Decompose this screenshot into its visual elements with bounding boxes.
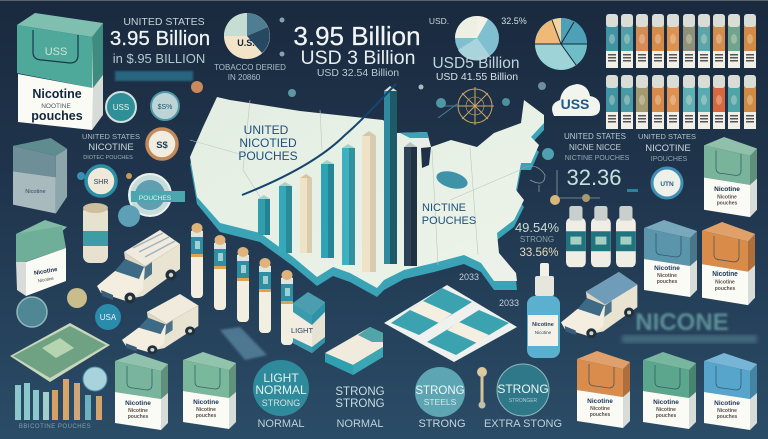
strength badge: light normal strong: STRONG xyxy=(262,398,300,408)
badge: pouches ribbon: POUCHES xyxy=(139,195,172,202)
caption: mini chart: BBICOTINE POUCHES xyxy=(19,424,91,430)
map label: west: POUCHES xyxy=(238,149,298,163)
small tin xyxy=(83,203,108,263)
tube row 1 xyxy=(606,14,756,68)
heading: USD5 Billion: USD 41.55 Billion xyxy=(436,71,518,83)
package: bottom blue box xyxy=(704,353,757,430)
strength badge: strong ring xyxy=(497,364,549,416)
cloud: USS: USS xyxy=(561,96,589,112)
package: large nicotine pouches box xyxy=(17,13,103,130)
blurred pouch pile xyxy=(220,327,267,360)
badge: pouches ribbon xyxy=(129,174,185,216)
package: small pack xyxy=(325,327,383,375)
package: bottom green box 1: pouches xyxy=(128,414,148,420)
package: green box lower left xyxy=(16,220,67,296)
badge: USA: USA xyxy=(100,313,117,322)
pouch tray xyxy=(384,285,517,362)
package: bottom orange box: Nicotine xyxy=(590,406,610,412)
map label: east: POUCHES xyxy=(422,215,476,227)
package: bottom orange box xyxy=(577,351,630,428)
badge: USS: USS xyxy=(113,103,129,112)
map label: east: NICTINE xyxy=(422,202,466,214)
package: bottom green box 3 xyxy=(643,352,696,429)
package: bottom green box 2: pouches xyxy=(196,413,216,419)
box text: Nicotine xyxy=(34,267,59,277)
badge: SHR: SHR xyxy=(94,179,108,186)
package: orange box: Nicotine xyxy=(712,271,738,278)
pie 2 labels: USD. xyxy=(429,16,449,26)
package: green box lower left: Nicotine xyxy=(37,276,55,283)
cloud: USS xyxy=(552,84,600,116)
text block: United States Nicotine right: IPOUCHES xyxy=(651,156,688,163)
package: bottom green box 3: pouches xyxy=(656,413,676,419)
text block: United States nicne: NICTINE POUCHES xyxy=(565,155,630,162)
badge: UTN xyxy=(652,168,682,198)
package: left middle box: Nicotine xyxy=(25,189,46,195)
bar chart xyxy=(258,86,417,272)
disc xyxy=(17,297,47,327)
caption: tobacco derived: IN 20860 xyxy=(228,73,261,82)
strength badge: strong steels: STRONG xyxy=(415,385,465,397)
strength label: strong: STRONG xyxy=(418,418,466,430)
product name: Nicotine xyxy=(32,87,82,101)
map label: west: UNITED xyxy=(244,123,289,137)
strength label: extra strong: EXTRA STONG xyxy=(484,418,562,430)
badge: S$ orange ring xyxy=(147,129,177,159)
badge: UTN: UTN xyxy=(660,181,674,188)
box label: LIGHT xyxy=(291,326,313,335)
package: bottom green box 3: Nicotine xyxy=(653,399,679,406)
strength badge: light normal strong xyxy=(253,360,309,416)
text block: United States Nicotine: NICOTINE xyxy=(88,142,134,153)
pie chart 2 xyxy=(455,16,499,60)
blurred word: nicone: NICONE xyxy=(635,309,729,336)
package: bottom orange box: Nicotine xyxy=(587,398,613,405)
van 1 xyxy=(97,230,180,304)
package: orange box: pouches xyxy=(715,286,735,292)
package: green box right: pouches xyxy=(717,201,737,207)
connector nodes xyxy=(520,148,638,205)
strength label: normal: NORMAL xyxy=(257,418,305,430)
statistics: strength share: STRONG xyxy=(520,235,554,244)
package: blue box: pouches xyxy=(657,279,677,285)
tube row 2 xyxy=(606,75,756,129)
text block: United States Nicotine right xyxy=(638,132,696,163)
small bottles xyxy=(566,206,636,267)
badge: SS% xyxy=(151,92,179,120)
strength badge: strong ring: STRONG xyxy=(497,382,549,396)
package: orange box: Nicotine xyxy=(715,279,735,286)
money stack xyxy=(10,323,110,382)
caption: tobacco derived: TOBACCO DERIED xyxy=(214,63,286,72)
van 2 xyxy=(122,294,198,354)
ball xyxy=(67,288,87,308)
package: bottom green box 2: Nicotine xyxy=(196,407,216,413)
strength badge: strong ring: STRONGER xyxy=(509,398,538,404)
badge: SS%: $S% xyxy=(158,104,172,111)
orange badge xyxy=(191,81,203,93)
year label: 2033 xyxy=(499,298,519,308)
strength text: strong strong xyxy=(335,386,385,410)
package: bottom green box 1 xyxy=(115,353,168,430)
strength badge: light normal strong: NORMAL xyxy=(255,383,307,397)
package: left middle box xyxy=(13,138,67,213)
figure: 32.36: 32.36 xyxy=(566,165,622,190)
text block: United States Nicotine xyxy=(82,132,140,161)
package: green box right: Nicotine xyxy=(714,186,740,193)
package: green box right: Nicotine xyxy=(717,194,737,200)
statistics: strength share: 33.56% xyxy=(519,247,559,259)
text block: United States nicne xyxy=(564,132,630,162)
package: bottom blue box: Nicotine xyxy=(714,400,740,407)
pin tool xyxy=(477,367,487,408)
heading: United States 3.95 Billion: 3.95 Billion xyxy=(110,27,210,50)
package: blue box: Nicotine xyxy=(654,265,680,272)
text block: United States nicne: NICNE NICCE xyxy=(569,143,621,152)
pie 2 labels: 32.5% xyxy=(501,16,527,26)
long tubes xyxy=(191,223,293,345)
pie chart 1 xyxy=(224,13,270,59)
icon: compass xyxy=(438,87,494,125)
heading: USD5 Billion xyxy=(432,55,520,83)
text block: United States Nicotine: UNITED STATES xyxy=(82,132,140,141)
package: bottom green box 2: Nicotine xyxy=(193,399,219,406)
package: orange box xyxy=(702,222,755,305)
network nodes xyxy=(280,18,546,108)
strength text: strong strong: STRONG xyxy=(335,386,385,398)
heading: United States 3.95 Billion xyxy=(110,16,210,66)
strength label: normal: NORMAL xyxy=(336,418,384,430)
blurred label bar xyxy=(115,71,193,81)
pie chart 3 xyxy=(535,18,587,70)
package: bottom green box 2 xyxy=(183,352,236,429)
package: green box right xyxy=(704,137,757,217)
package: bottom green box 1: Nicotine xyxy=(125,400,151,407)
heading: United States 3.95 Billion: UNITED STATES xyxy=(123,16,205,28)
package: bottom orange box: pouches xyxy=(590,412,610,418)
box label: USS xyxy=(45,46,67,58)
heading: center 3.95 Billion xyxy=(293,21,421,79)
year label: 2033 xyxy=(459,272,479,282)
mini bar chart xyxy=(15,379,102,420)
small print: NOOTINE xyxy=(41,103,71,110)
trend line xyxy=(242,84,396,195)
package: bottom green box 3: Nicotine xyxy=(656,407,676,413)
text block: United States Nicotine right: NICOTINE xyxy=(645,143,691,154)
badge: USA xyxy=(95,304,121,330)
van right xyxy=(561,272,637,338)
blurred caption xyxy=(622,335,757,343)
badge: SHR xyxy=(77,166,132,196)
map of the United States xyxy=(190,97,544,297)
package: light box xyxy=(291,292,325,353)
package: blue box xyxy=(644,220,697,297)
dropper bottle xyxy=(527,263,560,358)
heading: USD5 Billion: USD5 Billion xyxy=(432,55,520,72)
strength badge: light normal strong: LIGHT xyxy=(263,371,299,385)
bottle label: Nicotine xyxy=(535,330,552,335)
package: bottom green box 1: Nicotine xyxy=(128,408,148,414)
heading: center 3.95 Billion: 3.95 Billion xyxy=(293,21,421,51)
package: bottom blue box: pouches xyxy=(717,414,737,420)
package: blue box: Nicotine xyxy=(657,273,677,279)
strength text: strong strong: STRONG xyxy=(335,398,385,410)
bottle label: Nicotine xyxy=(532,322,554,328)
statistics: strength share xyxy=(515,220,559,259)
round disc xyxy=(118,205,140,227)
pie 2 labels xyxy=(429,16,527,26)
map label: west: NICOTIED xyxy=(239,136,297,150)
heading: center 3.95 Billion: USD 3 Billion xyxy=(301,47,415,69)
text block: United States Nicotine: DIOTEC POUCHES xyxy=(83,155,133,161)
badge: USS xyxy=(106,92,136,122)
strength badge: strong steels xyxy=(415,367,465,417)
text block: United States Nicotine right: UNITED STATES xyxy=(638,132,696,141)
map blob xyxy=(434,168,470,192)
heading: center 3.95 Billion: USD 32.54 Billion xyxy=(317,67,399,79)
product name: pouches xyxy=(31,109,83,123)
small round badge xyxy=(83,367,107,391)
text block: United States nicne: UNITED STATES xyxy=(564,132,626,141)
statistics: strength share: 49.54% xyxy=(515,220,559,235)
pie label: U.S. xyxy=(237,38,255,48)
badge: S$ orange ring: S$ xyxy=(156,140,169,151)
strength badge: strong steels: STEELS xyxy=(424,397,457,407)
package: bottom blue box: Nicotine xyxy=(717,408,737,414)
heading: United States 3.95 Billion: in $.95 BILLION xyxy=(113,51,205,66)
